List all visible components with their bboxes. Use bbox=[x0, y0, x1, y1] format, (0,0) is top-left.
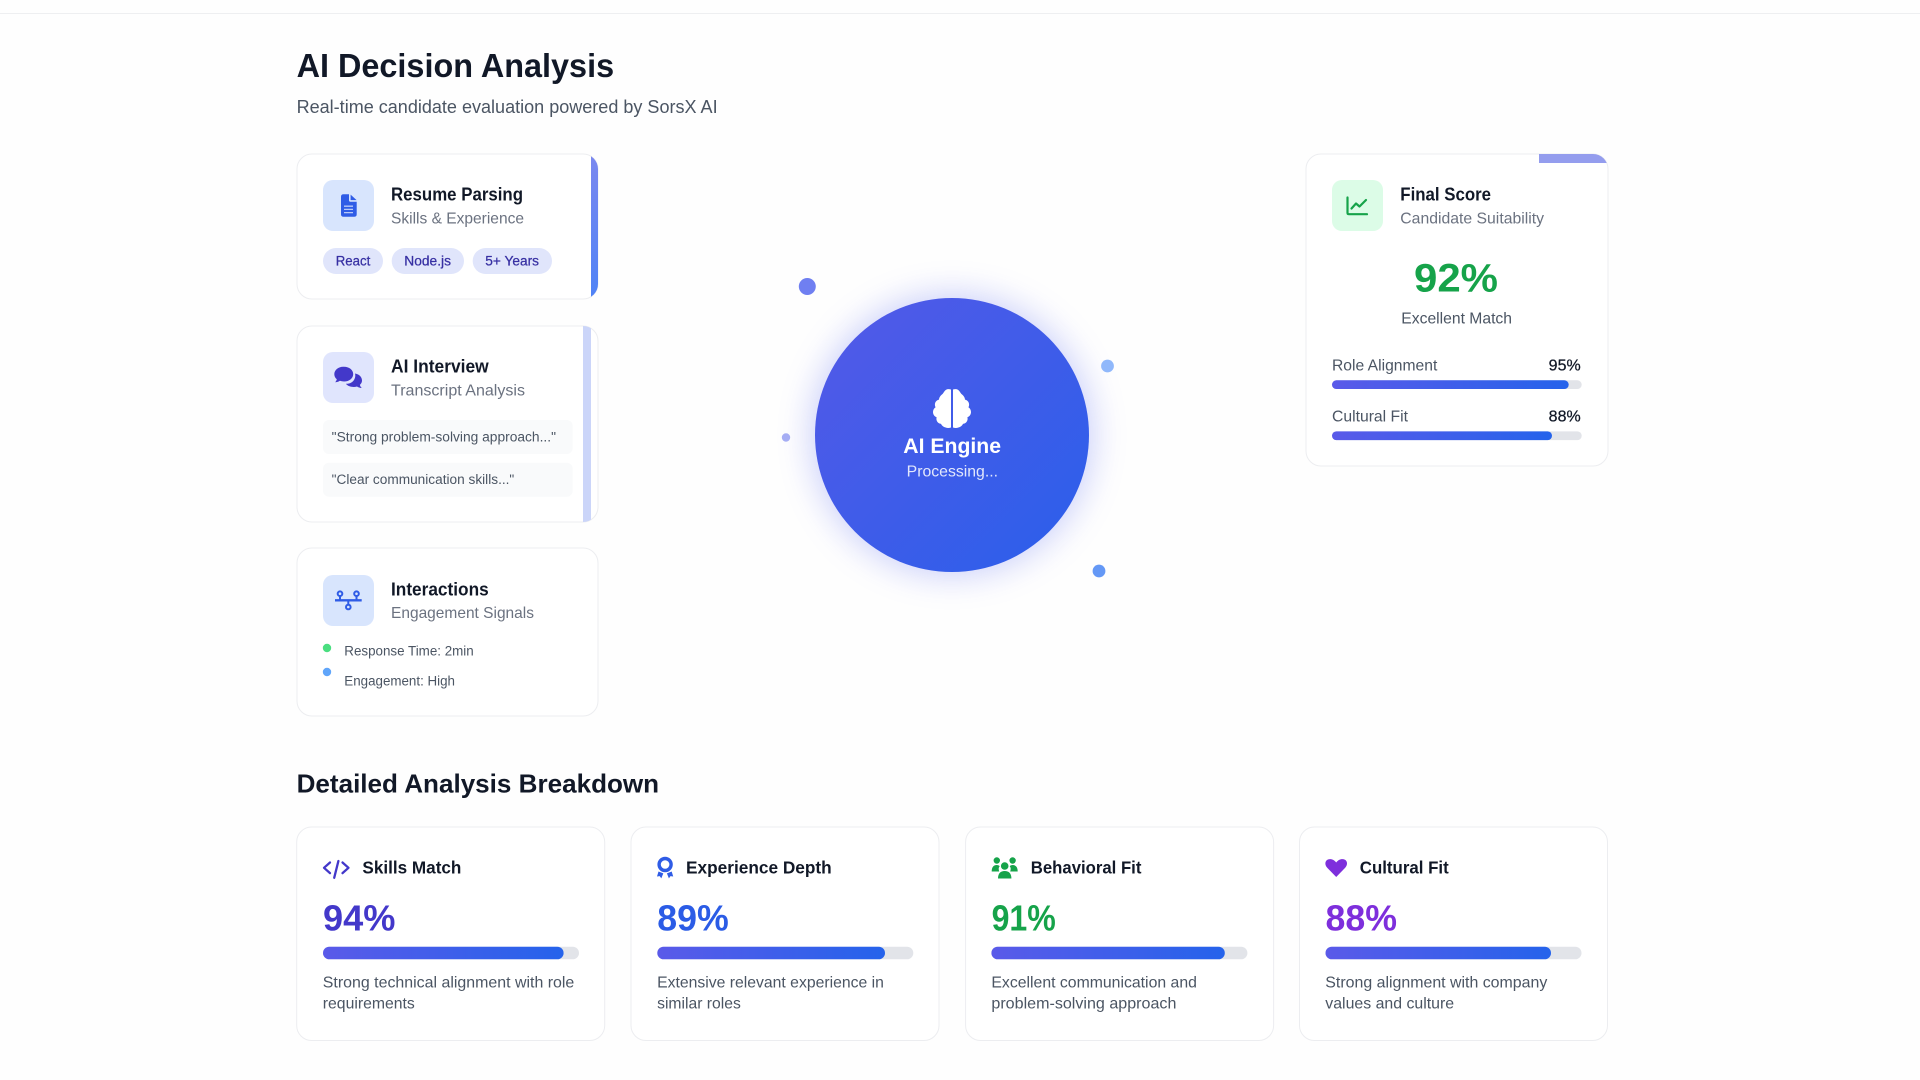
metric: cultural fit: 88% bbox=[1549, 408, 1581, 425]
title: AI Decision Analysis bbox=[297, 47, 614, 84]
icon: code bbox=[324, 861, 348, 878]
quote 1: "Strong problem-solving approach..." bbox=[332, 430, 556, 444]
heading: behavioral fit: Behavioral Fit bbox=[1031, 857, 1142, 877]
progress bar bbox=[1326, 947, 1582, 959]
subheading: Transcript Analysis bbox=[391, 382, 525, 399]
description: Excellent communication and bbox=[991, 974, 1197, 992]
description: Strong technical alignment with role bbox=[323, 974, 574, 992]
heading: cultural fit: Cultural Fit bbox=[1360, 857, 1449, 877]
metric: role alignment: 95% bbox=[1549, 357, 1581, 374]
description: values and culture bbox=[1325, 996, 1454, 1012]
quote 2: "Clear communication skills..." bbox=[332, 472, 515, 487]
panel: interactions bbox=[297, 548, 598, 716]
icon: chat bubbles bbox=[334, 367, 362, 388]
description bbox=[657, 974, 884, 1012]
value: 89%: 89% bbox=[657, 898, 729, 939]
panel: behavioral fit bbox=[966, 827, 1274, 1040]
description: problem-solving approach bbox=[991, 996, 1176, 1012]
icon: interaction nodes bbox=[335, 591, 362, 609]
heading: interactions: Interactions bbox=[391, 579, 489, 599]
final score value: 92% bbox=[1414, 256, 1498, 300]
icon: heart bbox=[1325, 859, 1347, 877]
metric: cultural fit bbox=[1332, 408, 1582, 440]
description bbox=[991, 974, 1197, 1012]
icon: award bbox=[657, 858, 673, 878]
description: Extensive relevant experience in bbox=[657, 974, 884, 992]
panel: experience depth bbox=[631, 827, 939, 1040]
value: 94%: 94% bbox=[323, 898, 395, 939]
panel: skills match bbox=[297, 827, 605, 1040]
heading: resume parsing: Resume Parsing bbox=[391, 184, 523, 204]
icon: brain bbox=[933, 389, 971, 428]
value: 88%: 88% bbox=[1326, 898, 1397, 939]
signal: response time: Response Time: 2min bbox=[344, 644, 474, 659]
quote 1 bbox=[323, 420, 573, 454]
subheading: Engagement Signals bbox=[391, 605, 534, 622]
panel: cultural fit bbox=[1300, 827, 1608, 1040]
signal: engagement bbox=[323, 668, 455, 689]
description bbox=[1325, 974, 1548, 1012]
description: requirements bbox=[323, 996, 415, 1012]
value: 91%: 91% bbox=[992, 898, 1056, 939]
progress bar bbox=[657, 947, 913, 959]
icon: users bbox=[992, 857, 1018, 878]
subheading: Skills & Experience bbox=[391, 210, 524, 227]
progress bar bbox=[323, 947, 579, 959]
description: Strong alignment with company bbox=[1325, 974, 1548, 992]
quote 2 bbox=[323, 463, 573, 497]
metric: cultural fit: Cultural Fit bbox=[1332, 408, 1409, 425]
description bbox=[323, 974, 574, 1012]
orbiting dots bbox=[782, 278, 1114, 577]
progress bar bbox=[991, 947, 1247, 959]
heading: ai interview: AI Interview bbox=[391, 356, 490, 376]
panel: resume parsing bbox=[297, 154, 598, 299]
hub label: AI Engine bbox=[903, 435, 1001, 458]
signal: engagement: Engagement: High bbox=[344, 674, 455, 689]
tags: 5+ Years bbox=[485, 254, 539, 269]
top divider bbox=[0, 13, 1920, 14]
subtitle: Real-time candidate evaluation powered by SorsX AI bbox=[297, 97, 718, 117]
score verdict: Excellent Match bbox=[1401, 310, 1512, 328]
panel: final score bbox=[1306, 154, 1608, 466]
metric: role alignment bbox=[1332, 357, 1582, 389]
description: similar roles bbox=[657, 996, 741, 1012]
section heading: Detailed Analysis Breakdown bbox=[297, 768, 659, 798]
hub status: Processing... bbox=[907, 464, 998, 480]
icon: line chart bbox=[1348, 198, 1367, 214]
panel: ai interview bbox=[297, 326, 598, 522]
ai engine hub bbox=[812, 295, 1092, 575]
heading: experience depth: Experience Depth bbox=[686, 857, 832, 877]
heading: final score: Final Score bbox=[1400, 184, 1491, 204]
tags: React bbox=[336, 254, 371, 269]
metric: role alignment: Role Alignment bbox=[1332, 357, 1438, 374]
icon: document bbox=[341, 194, 357, 217]
heading: skills match: Skills Match bbox=[362, 857, 461, 877]
tags bbox=[323, 248, 552, 274]
tags: Node.js bbox=[404, 254, 451, 269]
subheading: Candidate Suitability bbox=[1400, 210, 1544, 227]
